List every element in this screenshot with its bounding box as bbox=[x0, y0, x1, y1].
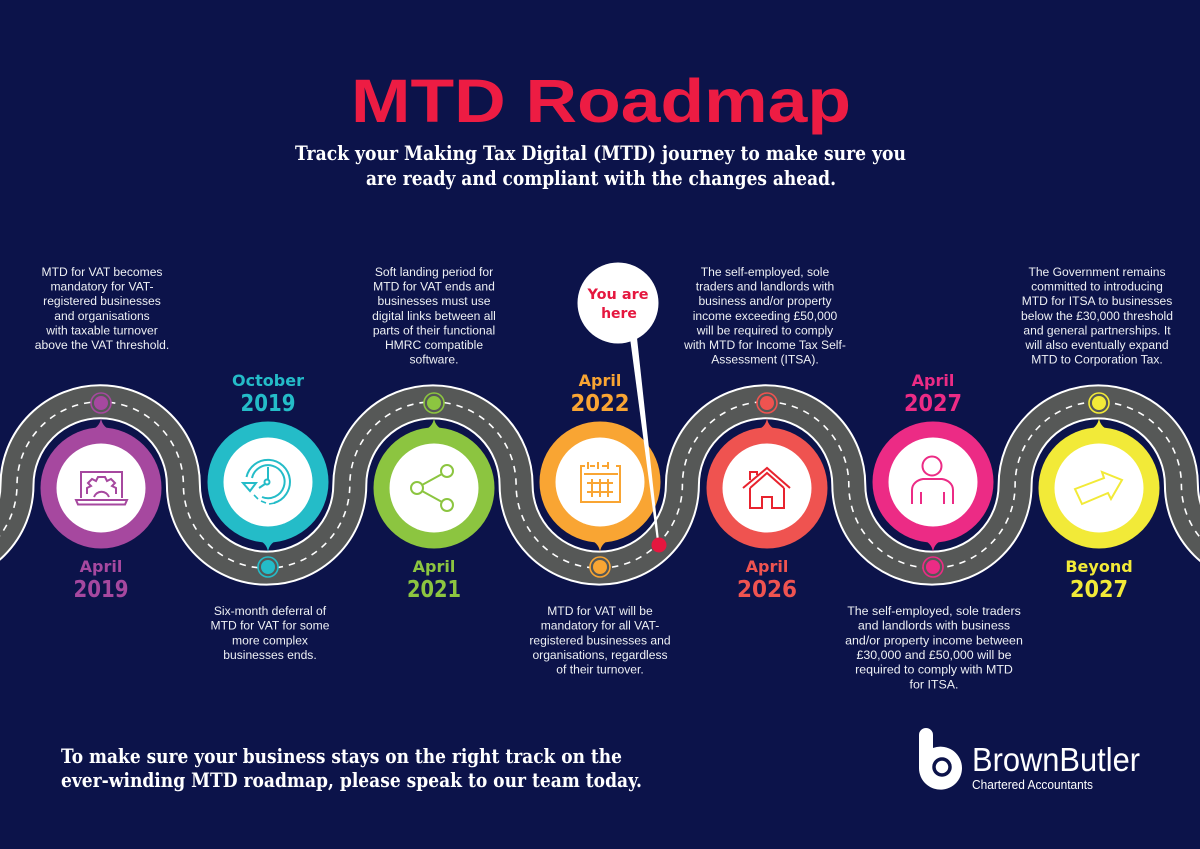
description bbox=[35, 265, 169, 352]
milestone: April 2027 bbox=[845, 371, 1023, 691]
road marker bbox=[923, 557, 943, 577]
pin bbox=[208, 422, 328, 552]
description: digital links between all bbox=[372, 309, 496, 323]
date bbox=[74, 557, 128, 603]
subtitle bbox=[295, 142, 906, 190]
logo: BrownButler: BrownButler bbox=[972, 741, 1140, 778]
milestone: April 2022 bbox=[529, 371, 671, 677]
road marker bbox=[1089, 393, 1109, 413]
subtitle: Track your Making Tax Digital (MTD) journey to make sure you bbox=[295, 142, 906, 165]
description: Six-month deferral of bbox=[214, 604, 327, 618]
description bbox=[529, 604, 671, 677]
description: MTD for VAT ends and bbox=[373, 280, 495, 294]
road marker bbox=[757, 393, 777, 413]
description: businesses must use bbox=[378, 294, 491, 308]
description: HMRC compatible bbox=[385, 338, 483, 352]
date bbox=[1065, 557, 1133, 603]
pin bbox=[872, 422, 994, 552]
footer call to action: To make sure your business stays on the right track on the bbox=[61, 745, 622, 768]
description: for ITSA. bbox=[910, 677, 958, 691]
callout: you are here: here bbox=[601, 306, 637, 322]
footer call to action bbox=[61, 745, 642, 792]
description bbox=[1021, 265, 1173, 367]
date: Beyond bbox=[1065, 557, 1133, 576]
milestone: April 2026 bbox=[683, 265, 846, 603]
icon: person bbox=[912, 456, 953, 504]
date: 2027 bbox=[1070, 577, 1128, 603]
description: of their turnover. bbox=[556, 663, 644, 677]
description: above the VAT threshold. bbox=[35, 338, 169, 352]
footer call to action: ever-winding MTD roadmap, please speak to our team today. bbox=[61, 769, 642, 792]
date: April bbox=[579, 371, 621, 390]
date: 2019 bbox=[240, 391, 296, 417]
milestone: Beyond 2027 bbox=[1021, 265, 1173, 603]
description: and/or property income between bbox=[845, 633, 1023, 647]
date: October bbox=[232, 371, 304, 390]
logo: BrownButler: Chartered Accountants bbox=[972, 778, 1093, 792]
description bbox=[372, 265, 496, 367]
date bbox=[570, 371, 630, 417]
description bbox=[211, 604, 330, 662]
description: organisations, regardless bbox=[532, 648, 668, 662]
road marker bbox=[590, 557, 610, 577]
subtitle: are ready and compliant with the changes ahead. bbox=[366, 167, 836, 190]
description bbox=[845, 604, 1023, 691]
description: will be required to comply bbox=[696, 323, 834, 337]
road marker bbox=[258, 557, 278, 577]
description: and landlords with business bbox=[858, 619, 1010, 633]
pin bbox=[706, 418, 828, 548]
description: with taxable turnover bbox=[45, 323, 158, 337]
milestone: April 2019 bbox=[35, 265, 169, 603]
description: MTD for VAT for some bbox=[211, 619, 330, 633]
description: The self-employed, sole bbox=[701, 265, 829, 279]
description: parts of their functional bbox=[373, 323, 495, 337]
date: 2019 bbox=[74, 577, 128, 603]
description: The self-employed, sole traders bbox=[847, 604, 1021, 618]
description: £30,000 and £50,000 will be bbox=[856, 648, 1012, 662]
icon: share nodes bbox=[411, 465, 453, 511]
description: below the £30,000 threshold bbox=[1021, 309, 1173, 323]
description: business and/or property bbox=[698, 294, 833, 308]
date: April bbox=[912, 371, 954, 390]
description: traders and landlords with bbox=[696, 280, 834, 294]
description: and organisations bbox=[54, 309, 150, 323]
date: 2026 bbox=[737, 577, 797, 603]
description: will also eventually expand bbox=[1024, 338, 1169, 352]
date: April bbox=[80, 557, 122, 576]
icon: arrow bbox=[1075, 472, 1122, 504]
title: MTD Roadmap bbox=[351, 67, 851, 135]
pin bbox=[374, 418, 494, 548]
date: 2022 bbox=[570, 391, 630, 417]
callout: you are here: You are bbox=[586, 287, 648, 303]
description: MTD for VAT will be bbox=[547, 604, 653, 618]
date: April bbox=[413, 557, 455, 576]
date: April bbox=[746, 557, 788, 576]
date bbox=[407, 557, 461, 603]
description: Soft landing period for bbox=[375, 265, 493, 279]
pin bbox=[540, 422, 660, 552]
description bbox=[683, 265, 846, 367]
logo: BrownButler bbox=[919, 728, 1140, 792]
icon: clock with arrow bbox=[243, 460, 290, 504]
milestone: April 2021 bbox=[372, 265, 496, 603]
description: software. bbox=[409, 353, 459, 367]
callout: you are here bbox=[578, 262, 666, 552]
description: The Government remains bbox=[1028, 265, 1166, 279]
description: MTD for ITSA to businesses bbox=[1022, 294, 1172, 308]
description: with MTD for Income Tax Self- bbox=[683, 338, 846, 352]
description: registered businesses bbox=[43, 294, 161, 308]
date: 2021 bbox=[407, 577, 461, 603]
description: Assessment (ITSA). bbox=[711, 353, 819, 367]
icon: laptop with gear bbox=[76, 472, 127, 504]
description: mandatory for all VAT- bbox=[541, 619, 659, 633]
description: registered businesses and bbox=[529, 633, 671, 647]
road marker bbox=[91, 393, 111, 413]
winding road bbox=[0, 402, 1200, 568]
date bbox=[232, 371, 304, 417]
pin bbox=[1038, 418, 1160, 548]
milestone: October 2019 bbox=[208, 371, 330, 662]
description: committed to introducing bbox=[1031, 280, 1163, 294]
date: 2027 bbox=[904, 391, 962, 417]
description: income exceeding £50,000 bbox=[693, 309, 838, 323]
description: MTD to Corporation Tax. bbox=[1031, 353, 1163, 367]
icon: calendar bbox=[581, 462, 620, 502]
date bbox=[904, 371, 962, 417]
icon: house bbox=[743, 468, 790, 508]
road marker bbox=[424, 393, 444, 413]
description: MTD for VAT becomes bbox=[42, 265, 162, 279]
description: mandatory for VAT- bbox=[50, 280, 154, 294]
description: more complex bbox=[232, 633, 308, 647]
description: required to comply with MTD bbox=[855, 663, 1013, 677]
date bbox=[737, 557, 797, 603]
description: and general partnerships. It bbox=[1023, 323, 1171, 337]
description: businesses ends. bbox=[223, 648, 317, 662]
pin bbox=[40, 418, 162, 548]
